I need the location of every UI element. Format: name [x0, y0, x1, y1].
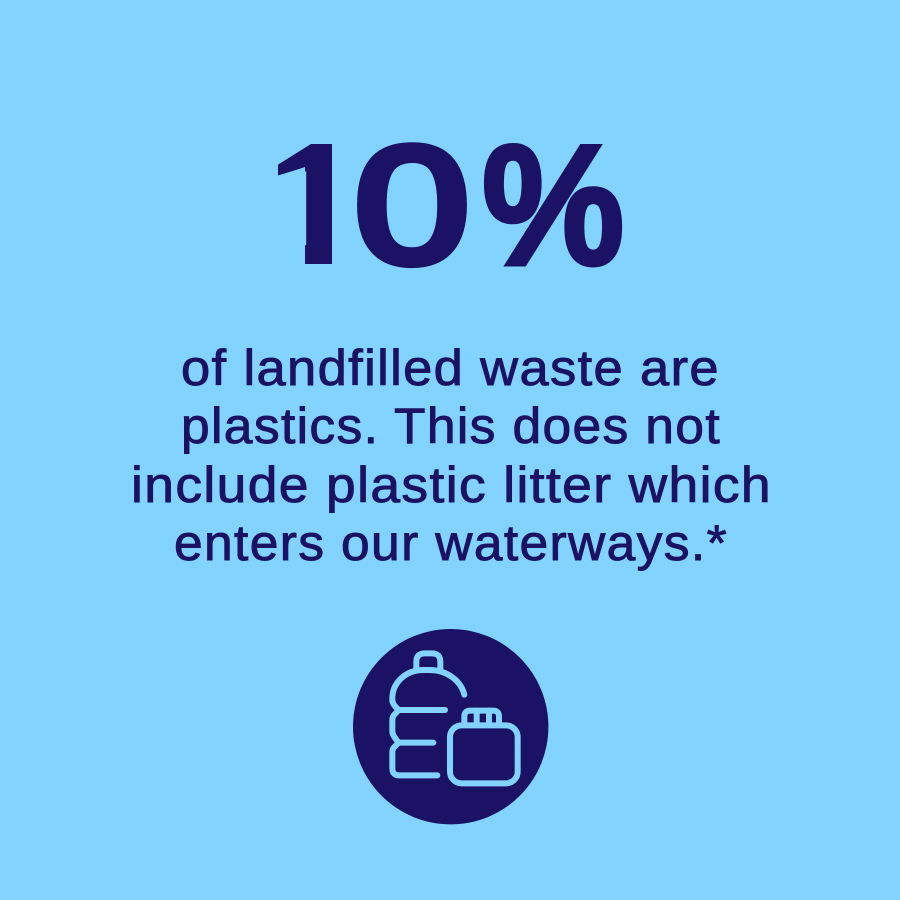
- bottle: [392, 653, 464, 775]
- line 2: plastics. This does not: [181, 398, 721, 454]
- line 4: enters our waterways.*: [174, 515, 728, 571]
- line 3: include plastic litter which: [131, 457, 772, 513]
- description text: [131, 340, 772, 571]
- jar: [450, 711, 518, 783]
- line 1: of landfilled waste are: [181, 340, 720, 396]
- big statistic: 10%: 0: [355, 113, 469, 297]
- big statistic: 10%: %: [483, 114, 623, 298]
- icon: plastic bottle and jar in circle: [353, 629, 548, 824]
- big statistic: 10%: [278, 142, 622, 268]
- big statistic: 10%: 1: [266, 113, 366, 297]
- infographic canvas: [134, 142, 768, 824]
